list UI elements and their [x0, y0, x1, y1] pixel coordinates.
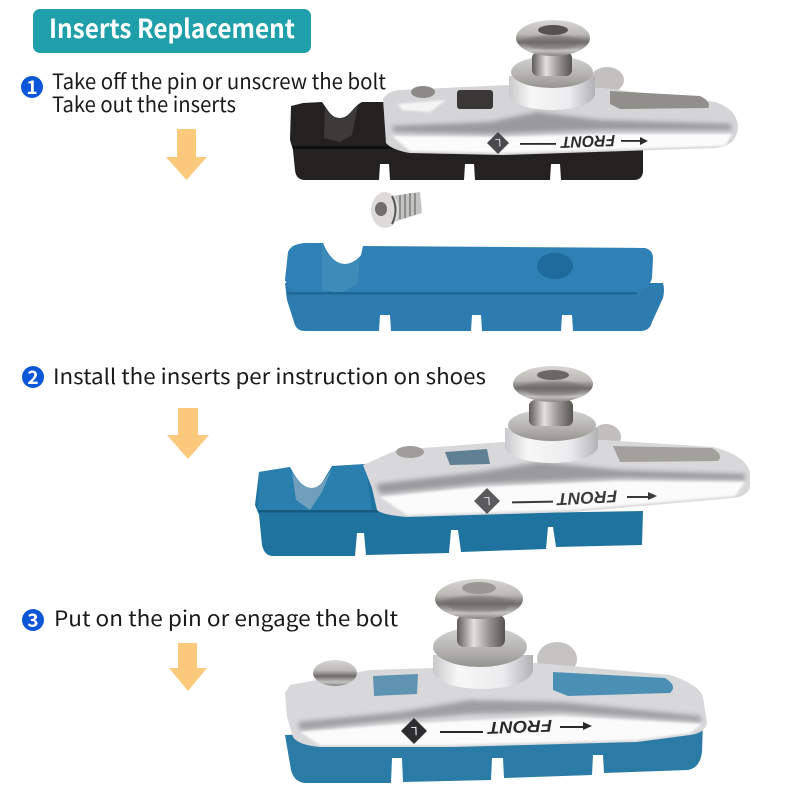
- small pin screw: [313, 660, 357, 686]
- insert: [255, 464, 643, 556]
- square slot: [457, 90, 493, 109]
- collar: [509, 76, 595, 110]
- bolt head: [513, 366, 593, 402]
- step 2 text: Install the inserts per instruction on shoes: [53, 361, 486, 391]
- collar: [505, 428, 598, 463]
- head shine: [522, 35, 584, 50]
- screw hole: [411, 86, 435, 98]
- recess highlight: [398, 100, 446, 112]
- step 1 text: Take out the inserts: [52, 89, 236, 119]
- step 1 badge: [21, 73, 43, 100]
- arrow down 3: [169, 643, 207, 691]
- diamond L mark: L: [483, 494, 491, 508]
- FRONT marking: [520, 131, 648, 150]
- body shading band: [298, 700, 702, 730]
- diamond L mark: L: [410, 724, 418, 738]
- silver shoe body: [363, 440, 750, 517]
- lower white band: [300, 716, 702, 745]
- blue insert: [285, 243, 664, 331]
- silver shoe body: [285, 663, 707, 747]
- bolt head: [516, 20, 590, 56]
- washer: [511, 56, 593, 88]
- square slot: [445, 449, 490, 465]
- step 1 text: [52, 66, 386, 119]
- screw hole: [396, 446, 424, 458]
- bolt neck: [532, 52, 572, 76]
- diamond L mark: [487, 132, 509, 154]
- body shading band: [376, 462, 745, 494]
- lower white band: [392, 134, 732, 153]
- diamond L mark: L: [495, 136, 502, 148]
- hex socket: [537, 370, 569, 380]
- arrow down 1: [166, 129, 207, 180]
- shoe 3 assembled: [285, 579, 707, 783]
- head shine: [520, 381, 586, 396]
- step 2 badge: [22, 363, 44, 390]
- shoe 2 with blue insert: [255, 366, 750, 556]
- lower white band: [380, 481, 745, 515]
- bolt neck: [457, 615, 505, 647]
- square slot: [373, 674, 418, 696]
- FRONT marking: [512, 486, 657, 509]
- bolt neck: [529, 400, 573, 426]
- head shine: [442, 596, 516, 612]
- long slot: [553, 672, 673, 696]
- shoe 1 with black insert: [290, 20, 738, 180]
- pin behind shoe: [537, 642, 577, 676]
- base top edge: [287, 292, 637, 294]
- title banner: Inserts Replacement: [49, 9, 295, 46]
- notch shading: [322, 246, 360, 293]
- step 3 text: Put on the pin or engage the bolt: [54, 603, 398, 633]
- insert top: [285, 243, 653, 293]
- loose screw: [371, 192, 422, 228]
- pin behind shoe: [590, 67, 624, 93]
- FRONT marking: [440, 716, 592, 737]
- collar: [433, 655, 533, 689]
- body shading band: [392, 112, 732, 134]
- FRONT marking: FRONT: [486, 716, 553, 737]
- long slot: [610, 91, 709, 109]
- insert: [285, 722, 703, 783]
- hex socket: [462, 582, 496, 594]
- recessed hole: [537, 253, 573, 279]
- FRONT marking: FRONT: [560, 131, 615, 150]
- step 1 text: Take off the pin or unscrew the bolt: [52, 66, 386, 96]
- arrow down 2: [167, 408, 209, 459]
- washer: [508, 409, 596, 441]
- diamond L mark: [474, 488, 500, 514]
- washer: [433, 627, 527, 667]
- long slot: [613, 446, 720, 462]
- hex socket: [538, 25, 568, 35]
- step 3 badge: 3: [27, 606, 39, 633]
- silver shoe body: [383, 85, 738, 155]
- step 1 badge: 1: [26, 73, 38, 100]
- pin behind shoe: [591, 424, 621, 450]
- step 3 badge: [22, 606, 44, 633]
- insert base: [285, 283, 664, 331]
- bolt head: [435, 579, 523, 619]
- diamond L mark: [401, 718, 427, 744]
- FRONT marking: FRONT: [555, 486, 618, 509]
- step 2 badge: 2: [27, 363, 39, 390]
- black insert: [290, 102, 643, 180]
